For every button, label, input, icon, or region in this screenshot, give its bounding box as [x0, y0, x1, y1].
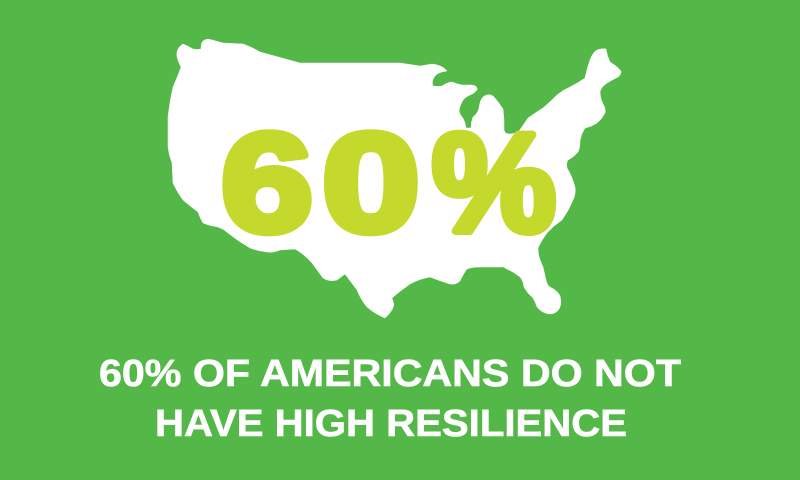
caption: [99, 353, 681, 445]
large 60% figure: %: [432, 104, 556, 261]
large 60% figure: 0: [322, 104, 420, 261]
caption: 60% OF AMERICANS DO NOT: [99, 353, 681, 395]
caption: HAVE HIGH RESILIENCE: [155, 403, 627, 445]
large 60% figure: [221, 104, 556, 261]
map of the United States: [168, 39, 621, 318]
large 60% figure: 6: [221, 104, 313, 261]
